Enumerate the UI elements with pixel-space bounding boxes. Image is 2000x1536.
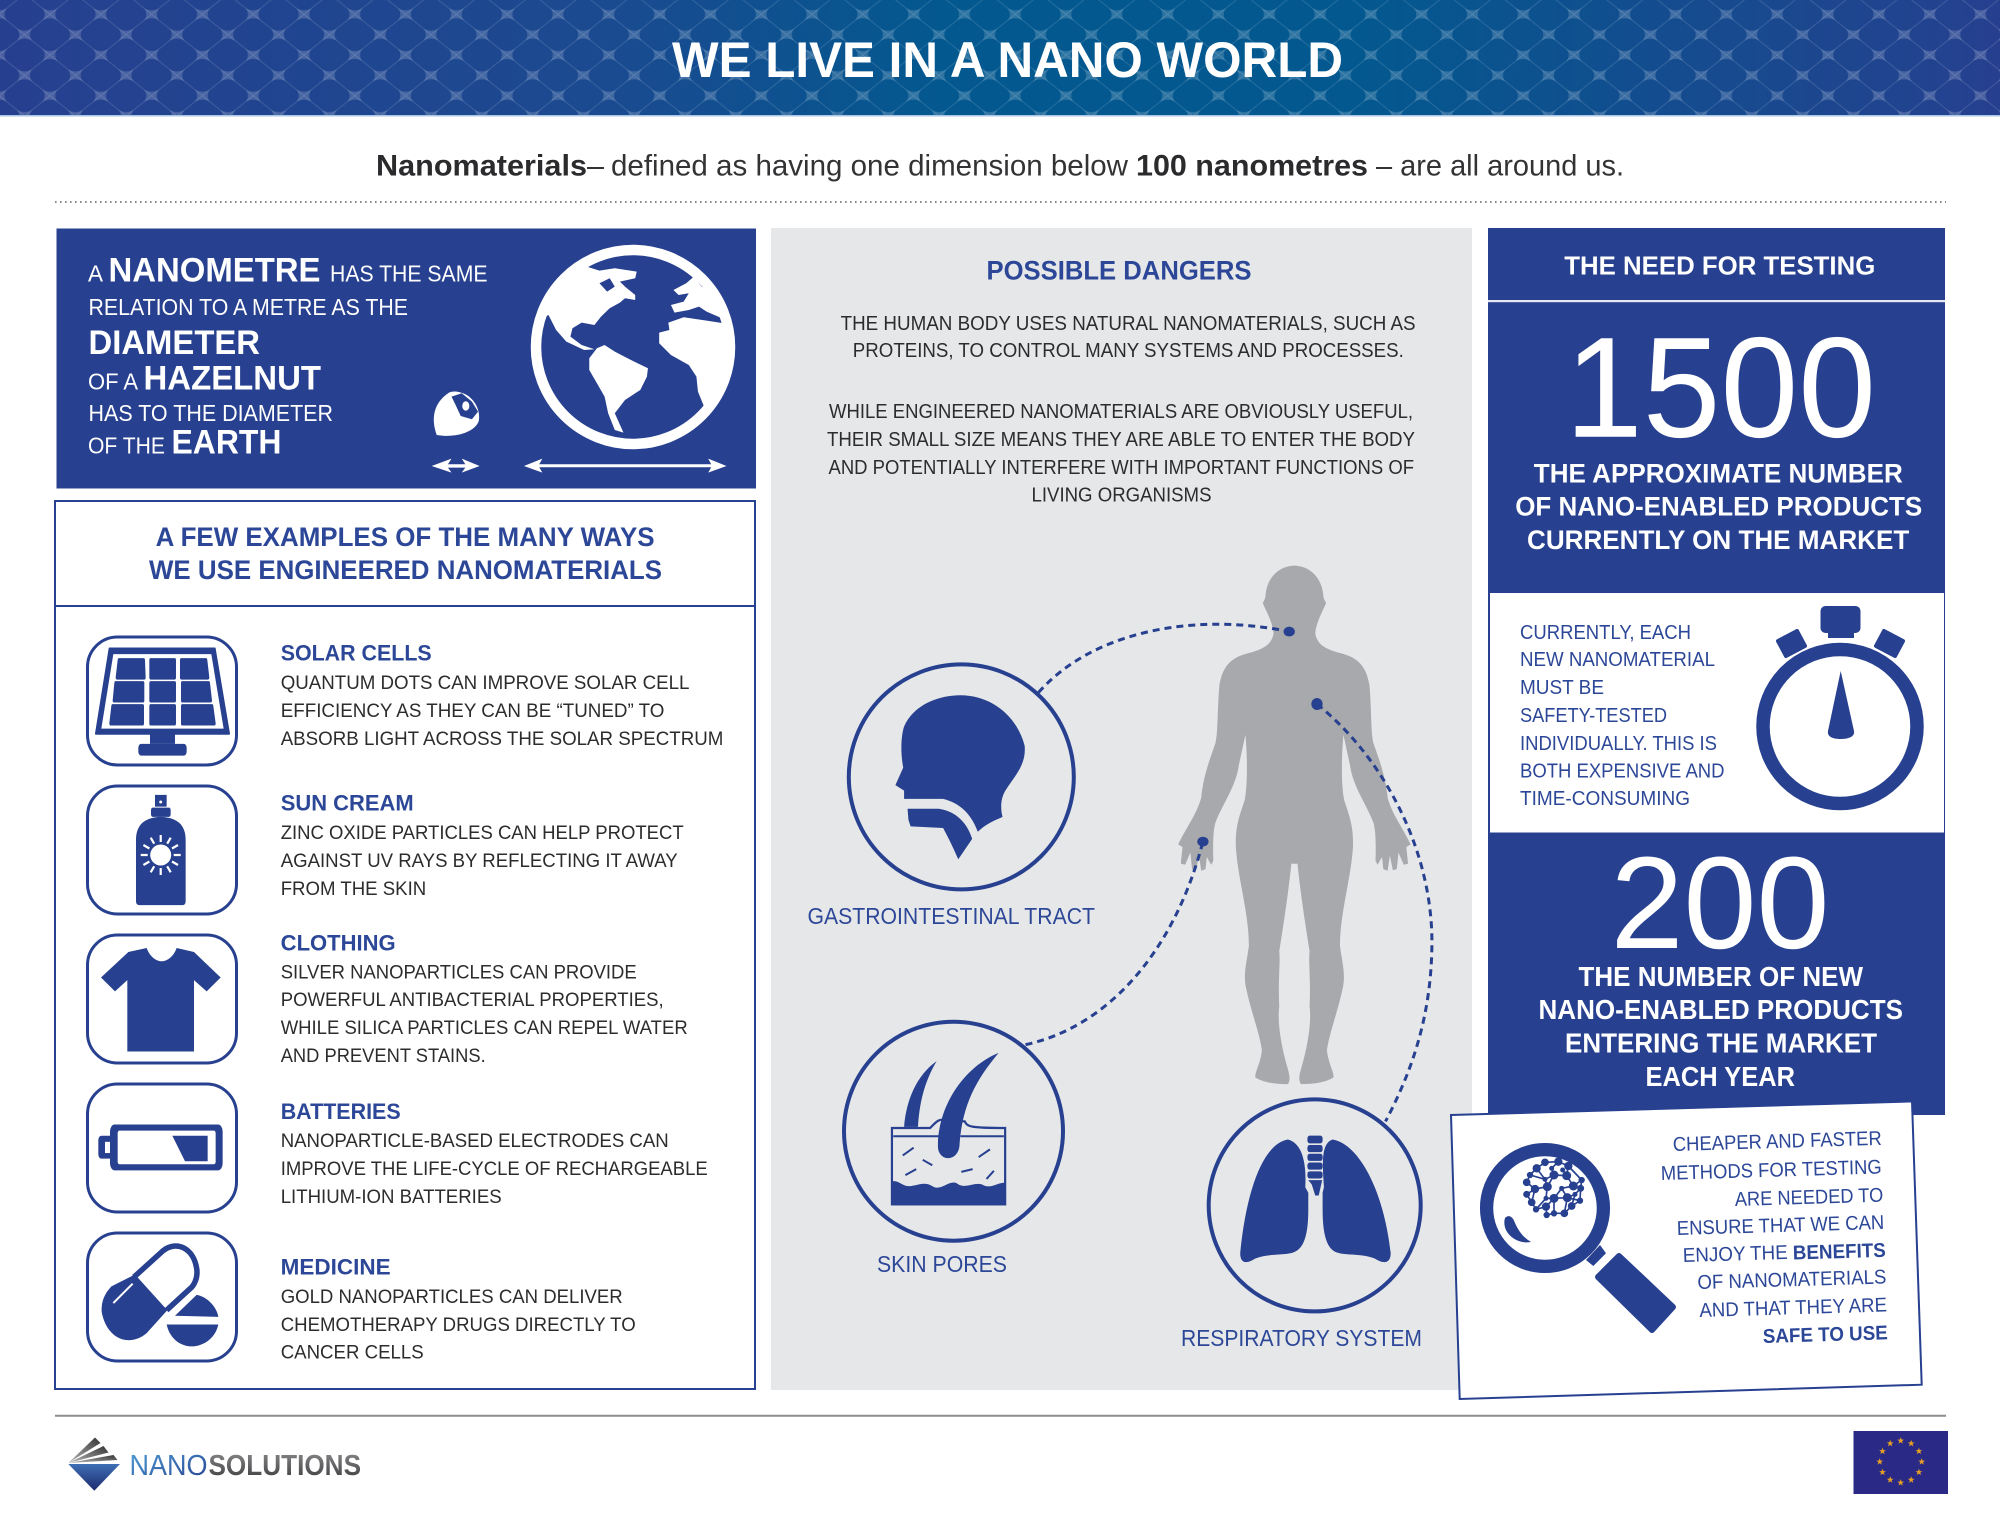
nanometre text: HAS THE SAME: [330, 261, 488, 287]
icon: gastrointestinal head: [849, 664, 1074, 889]
callout text: CHEAPER AND FASTER: [1672, 1128, 1882, 1156]
text: sun cream: ZINC OXIDE PARTICLES CAN HELP PROTECT: [281, 822, 684, 844]
subtitle: –: [587, 150, 604, 182]
text: batteries: IMPROVE THE LIFE-CYCLE OF RECHARGEABLE: [281, 1158, 708, 1180]
statistic caption: NANO-ENABLED PRODUCTS: [1538, 994, 1903, 1025]
callout text: METHODS FOR TESTING: [1660, 1156, 1882, 1185]
safety testing text: BOTH EXPENSIVE AND: [1520, 760, 1724, 782]
icon: medicine pills: [88, 1233, 236, 1361]
logo: nanosolutions: [68, 1438, 361, 1491]
body entry points: [1197, 627, 1323, 847]
icon: magnifying glass with nanoparticle: [1487, 1150, 1673, 1330]
callout text: [1660, 1128, 1888, 1348]
arrow: earth diameter: [524, 459, 727, 473]
dangers text: WHILE ENGINEERED NANOMATERIALS ARE OBVIOUSLY USEFUL,: [829, 400, 1413, 423]
text: medicine: CANCER CELLS: [281, 1342, 424, 1364]
dangers heading: POSSIBLE DANGERS: [986, 255, 1252, 285]
text: sun cream: FROM THE SKIN: [281, 878, 426, 900]
statistic caption: ENTERING THE MARKET: [1565, 1028, 1877, 1058]
dangers text: LIVING ORGANISMS: [1032, 484, 1212, 506]
text: medicine: CHEMOTHERAPY DRUGS DIRECTLY TO: [281, 1314, 636, 1336]
statistic caption: [1538, 961, 1903, 1092]
nanometre text: OF THE: [88, 432, 165, 458]
icon: eu flag: [1854, 1431, 1948, 1494]
statistic caption: [1515, 458, 1922, 555]
text: clothing: AND PREVENT STAINS.: [281, 1045, 486, 1067]
subtitle: [376, 150, 1624, 182]
callout text: ARE NEEDED TO: [1734, 1185, 1884, 1211]
panel: the need for testing: [1488, 228, 1945, 1115]
text: solar cells: ABSORB LIGHT ACROSS THE SOLAR SPECTRUM: [281, 728, 723, 750]
statistic caption: EACH YEAR: [1646, 1061, 1795, 1092]
icon: earth globe: [536, 250, 735, 444]
nanometre text: A: [88, 261, 104, 287]
nanometre text: NANOMETRE: [108, 252, 320, 290]
icon: skin pores: [844, 1022, 1063, 1241]
callout text: BENEFITS: [1792, 1240, 1886, 1264]
icon: sun cream: [88, 786, 236, 914]
callout text: ENSURE THAT WE CAN: [1676, 1212, 1885, 1240]
nanometre text: RELATION TO A METRE AS THE: [88, 294, 408, 320]
dangers text: [827, 312, 1416, 506]
text: sun cream: SUN CREAM: [281, 791, 414, 816]
icon: lungs: [1209, 1099, 1421, 1311]
examples heading: A FEW EXAMPLES OF THE MANY WAYS: [156, 522, 655, 552]
logo: nanosolutions: SOLUTIONS: [208, 1450, 361, 1482]
text: clothing: WHILE SILICA PARTICLES CAN REPEL WATER: [281, 1017, 688, 1039]
statistic caption: THE NUMBER OF NEW: [1578, 961, 1863, 992]
statistic caption: OF NANO-ENABLED PRODUCTS: [1515, 492, 1922, 522]
callout text: OF NANOMATERIALS: [1697, 1266, 1887, 1294]
text: batteries: NANOPARTICLE-BASED ELECTRODES CAN: [281, 1130, 669, 1152]
arrow: hazelnut diameter: [432, 459, 480, 473]
panel: safety testing note: [1490, 593, 1944, 832]
text: medicine: MEDICINE: [281, 1254, 391, 1280]
header banner: [0, 0, 2000, 116]
label: respiratory system: RESPIRATORY SYSTEM: [1181, 1325, 1422, 1351]
panel: examples of use: [55, 501, 755, 1389]
dangers text: AND POTENTIALLY INTERFERE WITH IMPORTANT FUNCTIONS OF: [828, 456, 1414, 479]
safety testing text: TIME-CONSUMING: [1520, 788, 1690, 810]
icon: t-shirt: [88, 935, 236, 1063]
nanometre text: OF A: [88, 368, 139, 394]
text: clothing: [281, 930, 688, 1067]
statistic caption: CURRENTLY ON THE MARKET: [1527, 525, 1910, 555]
text: batteries: LITHIUM-ION BATTERIES: [281, 1186, 502, 1208]
safety testing text: INDIVIDUALLY. THIS IS: [1520, 733, 1717, 755]
label: gastrointestinal tract: GASTROINTESTINAL TRACT: [808, 903, 1095, 929]
subtitle: – are all around us.: [1376, 150, 1624, 182]
icon: solar panel: [88, 637, 236, 765]
callout text: ENJOY THE: [1682, 1242, 1788, 1267]
examples heading: [149, 522, 662, 585]
title: WE LIVE IN A NANO WORLD: [672, 32, 1343, 88]
text: batteries: [281, 1099, 708, 1208]
text: solar cells: QUANTUM DOTS CAN IMPROVE SOLAR CELL: [281, 672, 690, 694]
subtitle: defined as having one dimension below: [611, 150, 1128, 182]
text: sun cream: [281, 791, 684, 900]
logo: nanosolutions: NANO: [130, 1450, 208, 1482]
panel: nanometre comparison: [56, 228, 756, 488]
human body silhouette: [1178, 566, 1411, 1084]
text: solar cells: SOLAR CELLS: [281, 641, 432, 666]
callout text: AND THAT THEY ARE: [1699, 1294, 1887, 1322]
icon: stopwatch: [1763, 606, 1917, 804]
safety testing text: NEW NANOMATERIAL: [1520, 649, 1715, 671]
text: sun cream: AGAINST UV RAYS BY REFLECTING IT AWAY: [281, 850, 678, 872]
text: solar cells: [281, 641, 723, 750]
statistic caption: THE APPROXIMATE NUMBER: [1534, 458, 1903, 488]
text: clothing: CLOTHING: [281, 930, 396, 956]
safety testing text: [1520, 622, 1724, 810]
text: medicine: GOLD NANOPARTICLES CAN DELIVER: [281, 1286, 623, 1308]
dashed connectors: [1026, 624, 1432, 1121]
safety testing text: CURRENTLY, EACH: [1520, 622, 1691, 644]
nanometre text: HAS TO THE DIAMETER: [88, 400, 333, 426]
label: skin pores: SKIN PORES: [877, 1251, 1007, 1277]
text: medicine: [281, 1254, 636, 1364]
text: clothing: SILVER NANOPARTICLES CAN PROVIDE: [281, 962, 637, 984]
text: batteries: BATTERIES: [281, 1099, 401, 1124]
statistic: 200: 200: [1610, 829, 1830, 976]
icon: battery: [88, 1084, 236, 1212]
dangers text: PROTEINS, TO CONTROL MANY SYSTEMS AND PROCESSES.: [853, 339, 1404, 362]
nanometre text: [88, 252, 488, 462]
examples heading: WE USE ENGINEERED NANOMATERIALS: [149, 555, 662, 585]
testing heading: THE NEED FOR TESTING: [1564, 250, 1875, 280]
panel: possible dangers: [771, 228, 1472, 1390]
safety testing text: MUST BE: [1520, 677, 1604, 699]
callout text: SAFE TO USE: [1762, 1322, 1888, 1348]
safety testing text: SAFETY-TESTED: [1520, 705, 1667, 727]
nanometre text: EARTH: [172, 424, 282, 462]
statistic: 1500: 1500: [1565, 309, 1876, 468]
subtitle: Nanomaterials: [376, 150, 587, 182]
icon: hazelnut: [434, 392, 479, 436]
subtitle: 100 nanometres: [1136, 150, 1368, 182]
text: solar cells: EFFICIENCY AS THEY CAN BE “TUNED” TO: [281, 700, 664, 722]
nanometre text: DIAMETER: [88, 324, 260, 362]
dangers text: THEIR SMALL SIZE MEANS THEY ARE ABLE TO ENTER THE BODY: [827, 428, 1415, 451]
nanometre text: HAZELNUT: [144, 360, 321, 398]
text: clothing: POWERFUL ANTIBACTERIAL PROPERTIES,: [281, 989, 664, 1011]
dangers text: THE HUMAN BODY USES NATURAL NANOMATERIALS, SUCH AS: [841, 312, 1416, 335]
panel: tilted callout card: [1451, 1101, 1922, 1399]
